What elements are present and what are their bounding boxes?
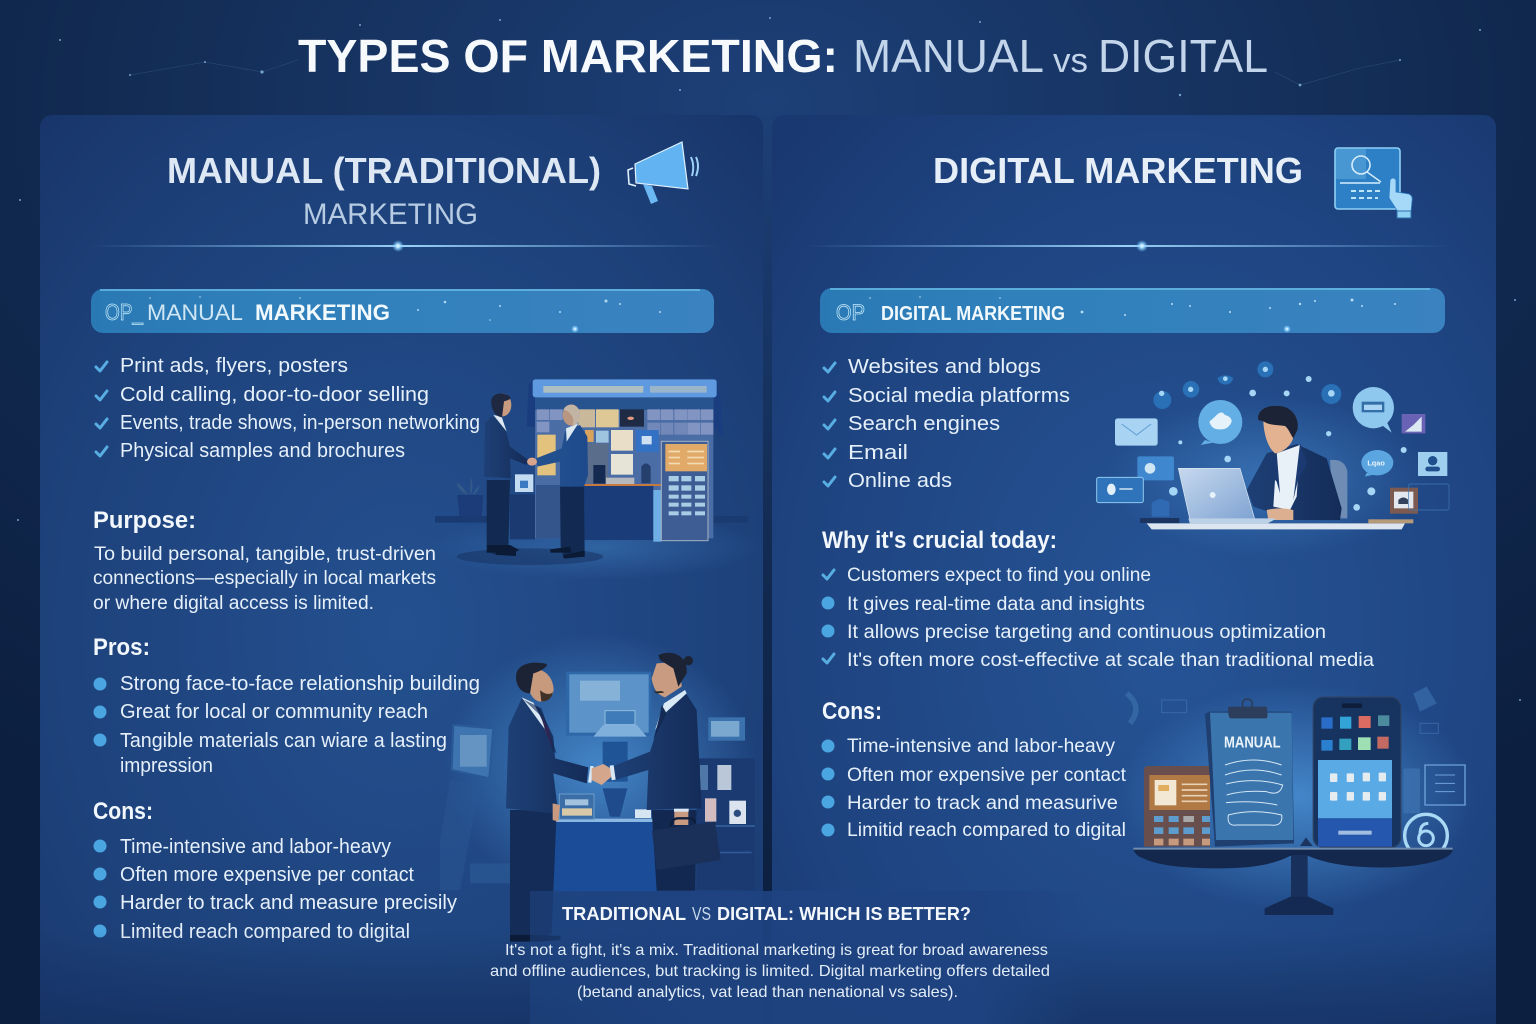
- section bar: manual marketing: [91, 289, 714, 333]
- illustration: scale with clipboard, tablet and phone: MANUAL: [1224, 735, 1281, 752]
- callout body text: (betand analytics, vat lead than nenational vs sales).: [577, 984, 958, 1001]
- divider: manual heading: [90, 240, 720, 252]
- callout heading: TRADITIONAL: [562, 904, 686, 924]
- text block: why it's crucial today: It allows precise targeting and continuous optimization: [847, 622, 1326, 643]
- text block: why it's crucial today: Why it's crucial today:: [822, 527, 1057, 554]
- text block: digital cons: Cons:: [822, 698, 882, 725]
- text block: why it's crucial today: [822, 527, 1374, 671]
- list: digital channels: Social media platforms: [848, 385, 1070, 407]
- callout body text: [490, 942, 1050, 1001]
- text block: why it's crucial today: Customers expect to find you online: [847, 565, 1151, 586]
- panel: digital marketing: [772, 115, 1496, 1024]
- title: vs: [1053, 42, 1088, 80]
- text block: manual pros: Strong face-to-face relationship building: [120, 673, 480, 695]
- text block: manual cons: [93, 798, 457, 943]
- text block: manual cons: Harder to track and measure precisily: [120, 892, 457, 914]
- panel heading: manual: [167, 150, 601, 231]
- list: digital channels: Online ads: [848, 470, 952, 492]
- text block: manual pros: Great for local or community reach: [120, 701, 428, 723]
- panel heading: manual: MANUAL (TRADITIONAL): [167, 150, 601, 191]
- text block: purpose: connections—especially in local markets: [93, 568, 436, 589]
- text block: digital cons: Time-intensive and labor-heavy: [847, 736, 1115, 757]
- icon: search screen with pointer: [1335, 148, 1412, 218]
- list: digital channels: Websites and blogs: [848, 356, 1041, 378]
- title: [298, 30, 1268, 82]
- section bar: manual marketing: OP_: [105, 299, 144, 325]
- text block: purpose: [93, 507, 436, 614]
- text block: manual cons: Often more expensive per contact: [120, 864, 414, 886]
- illustration: scale with clipboard, tablet and phone: [1117, 683, 1477, 915]
- section bar: manual marketing: MARKETING: [255, 300, 390, 325]
- title: DIGITAL: [1098, 30, 1268, 82]
- callout body text: It's not a fight, it's a mix. Traditional marketing is great for broad awareness: [505, 942, 1048, 959]
- text block: purpose: Purpose:: [93, 507, 196, 534]
- panel heading: manual: MARKETING: [303, 198, 478, 231]
- text block: digital cons: [822, 698, 1127, 841]
- illustration: two businessmen shaking hands: [440, 633, 757, 942]
- callout heading: VS: [692, 904, 711, 924]
- illustration: trade show booth handshake: [431, 379, 763, 580]
- text block: why it's crucial today: It gives real-time data and insights: [847, 594, 1145, 615]
- callout body text: and offline audiences, but tracking is limited. Digital marketing offers detailed: [490, 963, 1050, 980]
- text block: manual pros: Pros:: [93, 634, 150, 661]
- text block: purpose: To build personal, tangible, trust-driven: [94, 544, 436, 565]
- text block: manual cons: Time-intensive and labor-heavy: [120, 836, 391, 858]
- section bar: digital marketing: [820, 288, 1445, 333]
- text block: why it's crucial today: It's often more cost-effective at scale than traditional media: [847, 650, 1374, 671]
- text block: manual pros: Tangible materials can wiare a lasting: [120, 730, 447, 752]
- list: digital channels: Search engines: [848, 413, 1000, 435]
- section bar: manual marketing: MANUAL: [147, 300, 243, 325]
- illustration: marketer at laptop with floating icons: Lqao: [1367, 459, 1385, 468]
- illustration: marketer at laptop with floating icons: [1097, 361, 1449, 557]
- list: manual channels: Events, trade shows, in-person networking: [120, 412, 480, 434]
- text block: digital cons: Limitid reach compared to digital: [847, 820, 1126, 841]
- list: manual channels: Print ads, flyers, posters: [120, 355, 348, 377]
- callout heading: [562, 904, 971, 924]
- text block: purpose: or where digital access is limited.: [93, 593, 374, 614]
- icon: megaphone: [628, 142, 698, 204]
- list: manual channels: Physical samples and brochures: [120, 440, 405, 462]
- text block: manual pros: impression: [120, 755, 213, 777]
- title: MANUAL: [853, 30, 1044, 82]
- list: digital channels: [824, 356, 1070, 492]
- text block: manual cons: Limited reach compared to digital: [120, 921, 410, 943]
- text block: digital cons: Harder to track and measurive: [847, 793, 1118, 814]
- text block: manual pros: [93, 634, 480, 777]
- divider: digital heading: [805, 240, 1450, 252]
- text block: manual cons: Cons:: [93, 798, 153, 825]
- list: manual channels: Cold calling, door-to-door selling: [120, 384, 429, 406]
- callout: traditional vs digital: [490, 891, 1090, 1024]
- panel heading: digital: DIGITAL MARKETING: [933, 150, 1303, 191]
- section bar: digital marketing: OP: [836, 300, 865, 325]
- list: manual channels: [96, 355, 480, 462]
- section bar: digital marketing: DIGITAL MARKETING: [881, 303, 1065, 325]
- title: TYPES OF MARKETING:: [298, 30, 838, 82]
- panel: manual traditional marketing: [40, 115, 763, 1024]
- list: digital channels: Email: [848, 442, 908, 464]
- text block: digital cons: Often mor expensive per contact: [847, 765, 1127, 786]
- callout heading: DIGITAL: WHICH IS BETTER?: [717, 904, 971, 924]
